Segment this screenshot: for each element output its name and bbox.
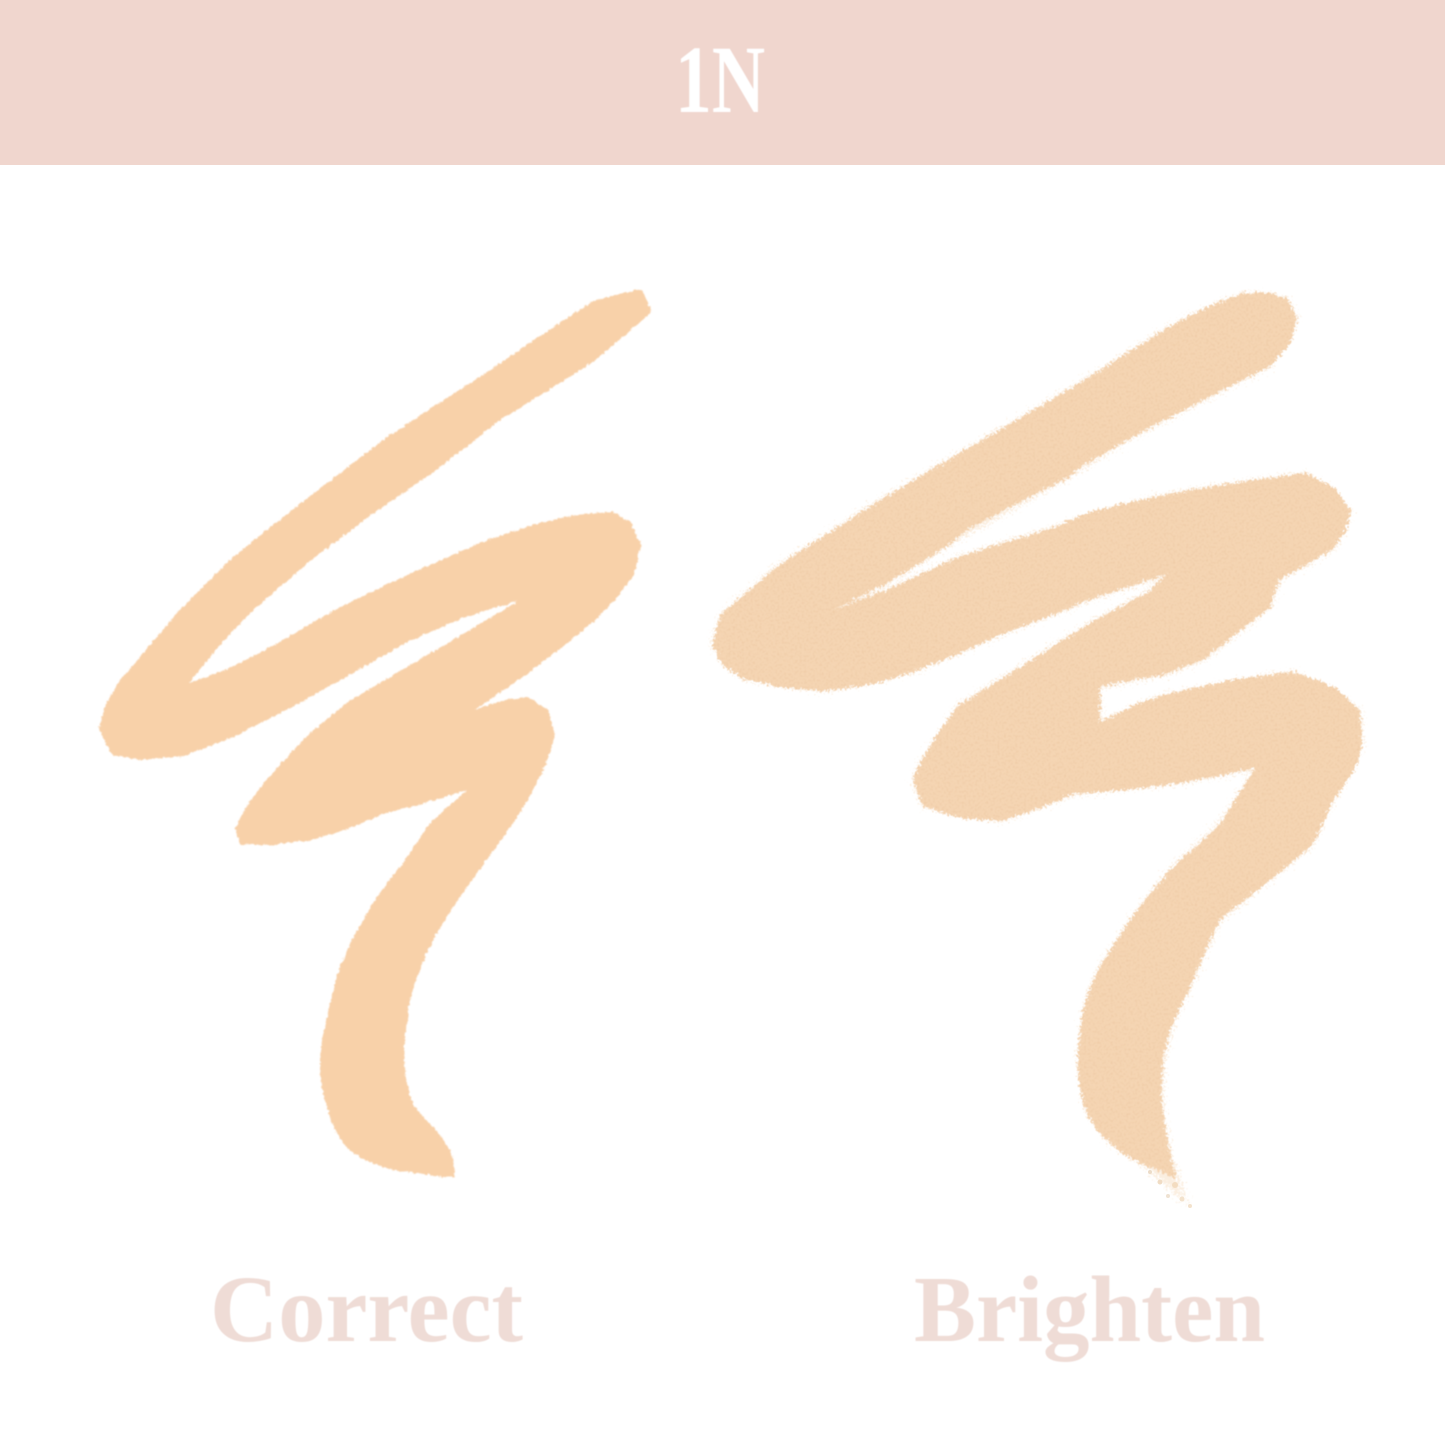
header band [0, 0, 1445, 165]
swatch: brighten [712, 293, 1362, 1208]
label: brighten: Brighten [914, 1258, 1265, 1362]
shade label: 1N [675, 26, 765, 133]
label: correct: Correct [210, 1256, 523, 1362]
powder dust [712, 293, 1362, 1208]
swatch: correct [99, 290, 652, 1177]
